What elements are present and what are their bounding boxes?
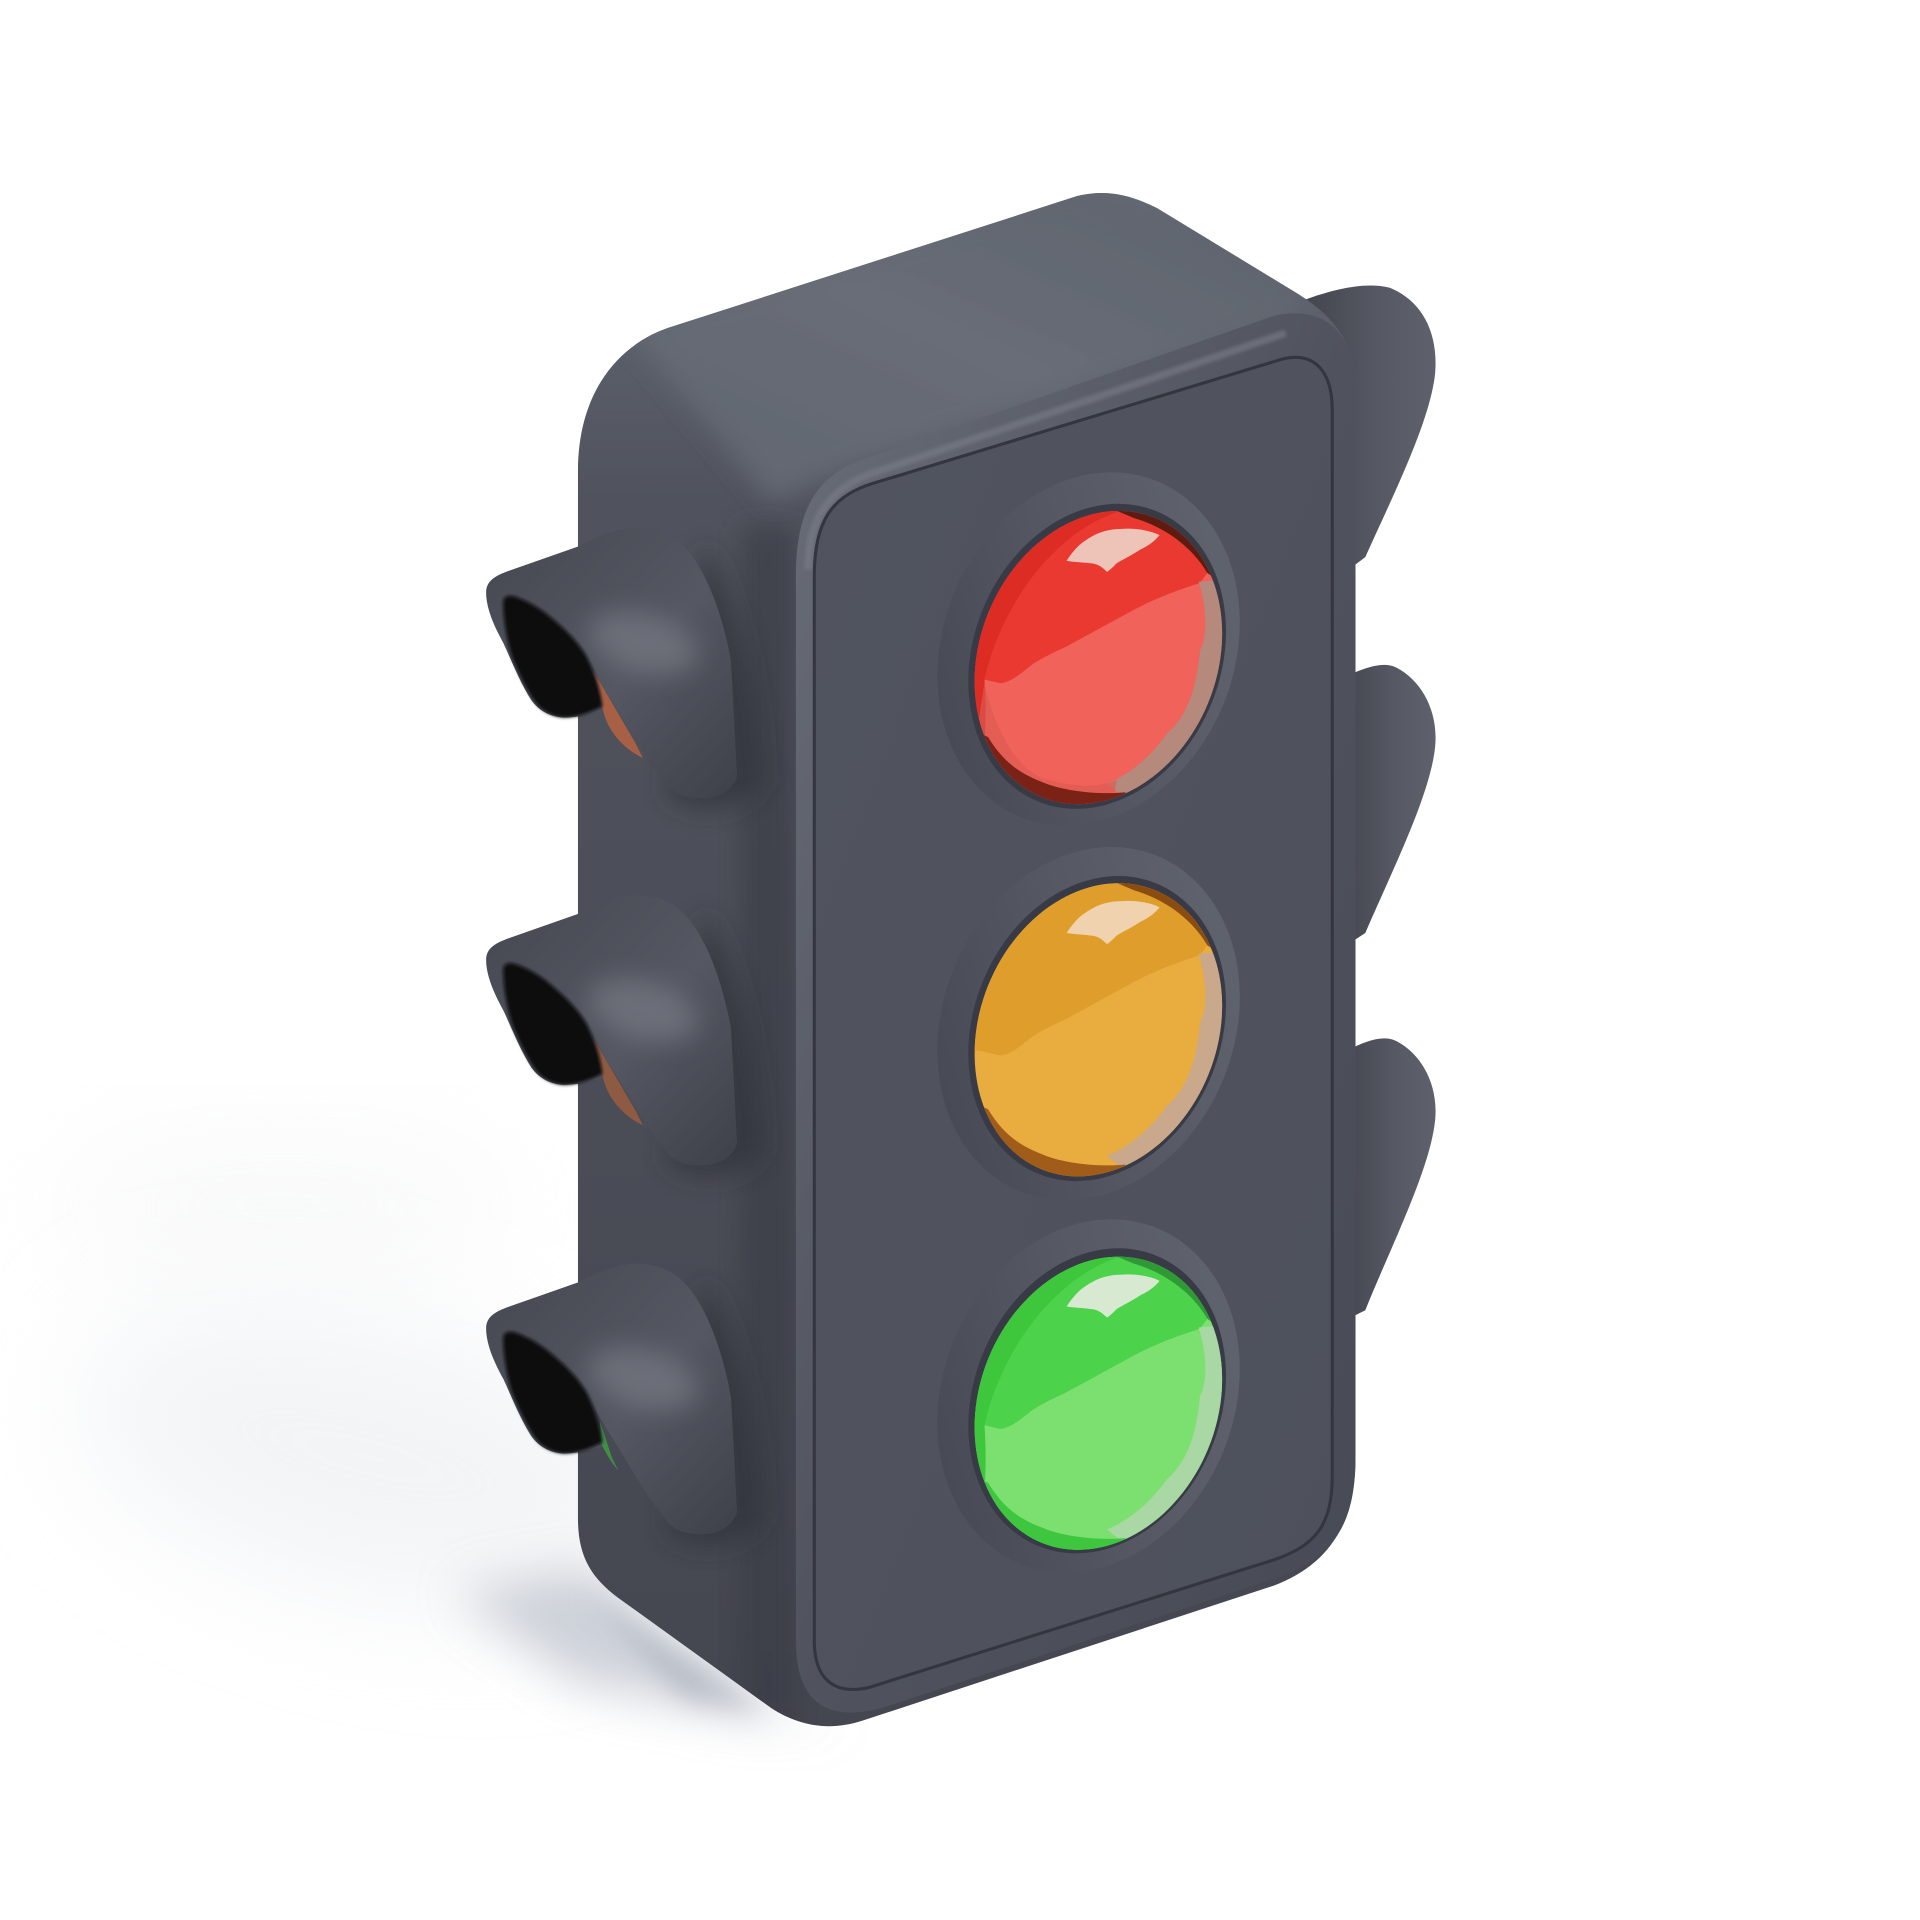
- visor: left bottom: [486, 1264, 762, 1544]
- visor: left middle: [486, 895, 762, 1176]
- recess: [924, 465, 1271, 848]
- bezel: [886, 1173, 1292, 1619]
- lens: [974, 511, 1222, 804]
- bezel: [886, 426, 1292, 872]
- recess: [924, 1209, 1271, 1592]
- side shadow: [741, 527, 796, 1727]
- lens: [974, 1256, 1222, 1550]
- floor shadow: [49, 1151, 857, 1729]
- amber light: [944, 847, 1240, 1181]
- visor: right middle: [1341, 665, 1436, 949]
- lens: [974, 883, 1222, 1176]
- green light: [968, 1220, 1240, 1554]
- front panel: [814, 357, 1332, 1689]
- housing body: [578, 184, 1356, 1727]
- visor: right bottom: [1341, 1038, 1436, 1322]
- right visor hoods: [1304, 286, 1436, 1322]
- visor: left top: [486, 528, 762, 808]
- recess: [924, 837, 1271, 1220]
- visor: right top: [1304, 286, 1436, 576]
- red light: [938, 472, 1240, 809]
- bezel: [886, 801, 1292, 1246]
- left visor hoods: [486, 528, 762, 1544]
- housing top surface: [624, 184, 1316, 502]
- illustration: 3D traffic light: [132, 193, 1436, 1738]
- front face frame: [796, 313, 1356, 1713]
